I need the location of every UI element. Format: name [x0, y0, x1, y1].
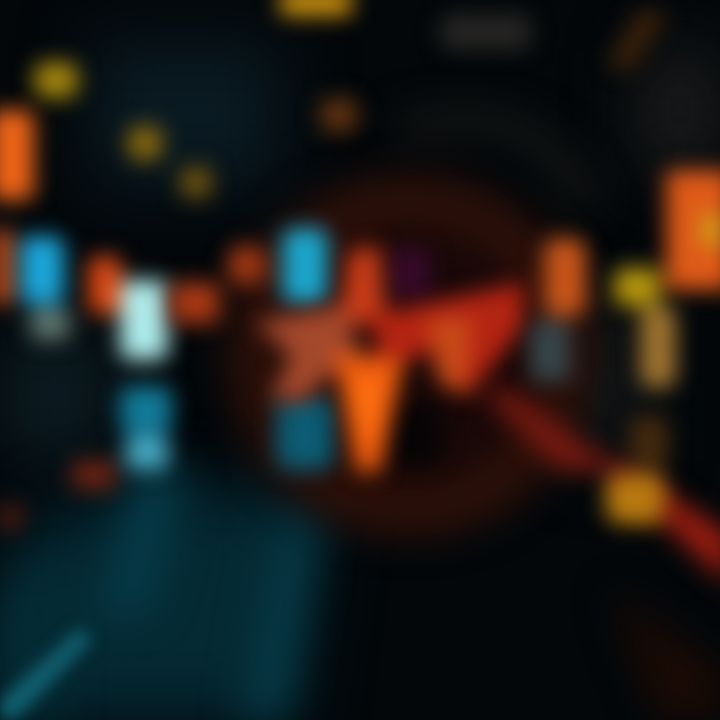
teal floor streaks: [0, 470, 320, 720]
yellow lights: [34, 0, 668, 198]
dark arcs and bottom right road: [400, 120, 720, 720]
red diagonal road light: [480, 390, 720, 585]
left neon signs: [0, 110, 172, 530]
right neon signs: [530, 170, 720, 524]
teal street floor: [0, 490, 320, 720]
central orange and red star burst: [255, 246, 524, 472]
dim building shapes: [0, 40, 720, 460]
dark red halo: [255, 200, 565, 510]
centre lights: [170, 228, 440, 470]
light streak on floor: [0, 628, 92, 720]
